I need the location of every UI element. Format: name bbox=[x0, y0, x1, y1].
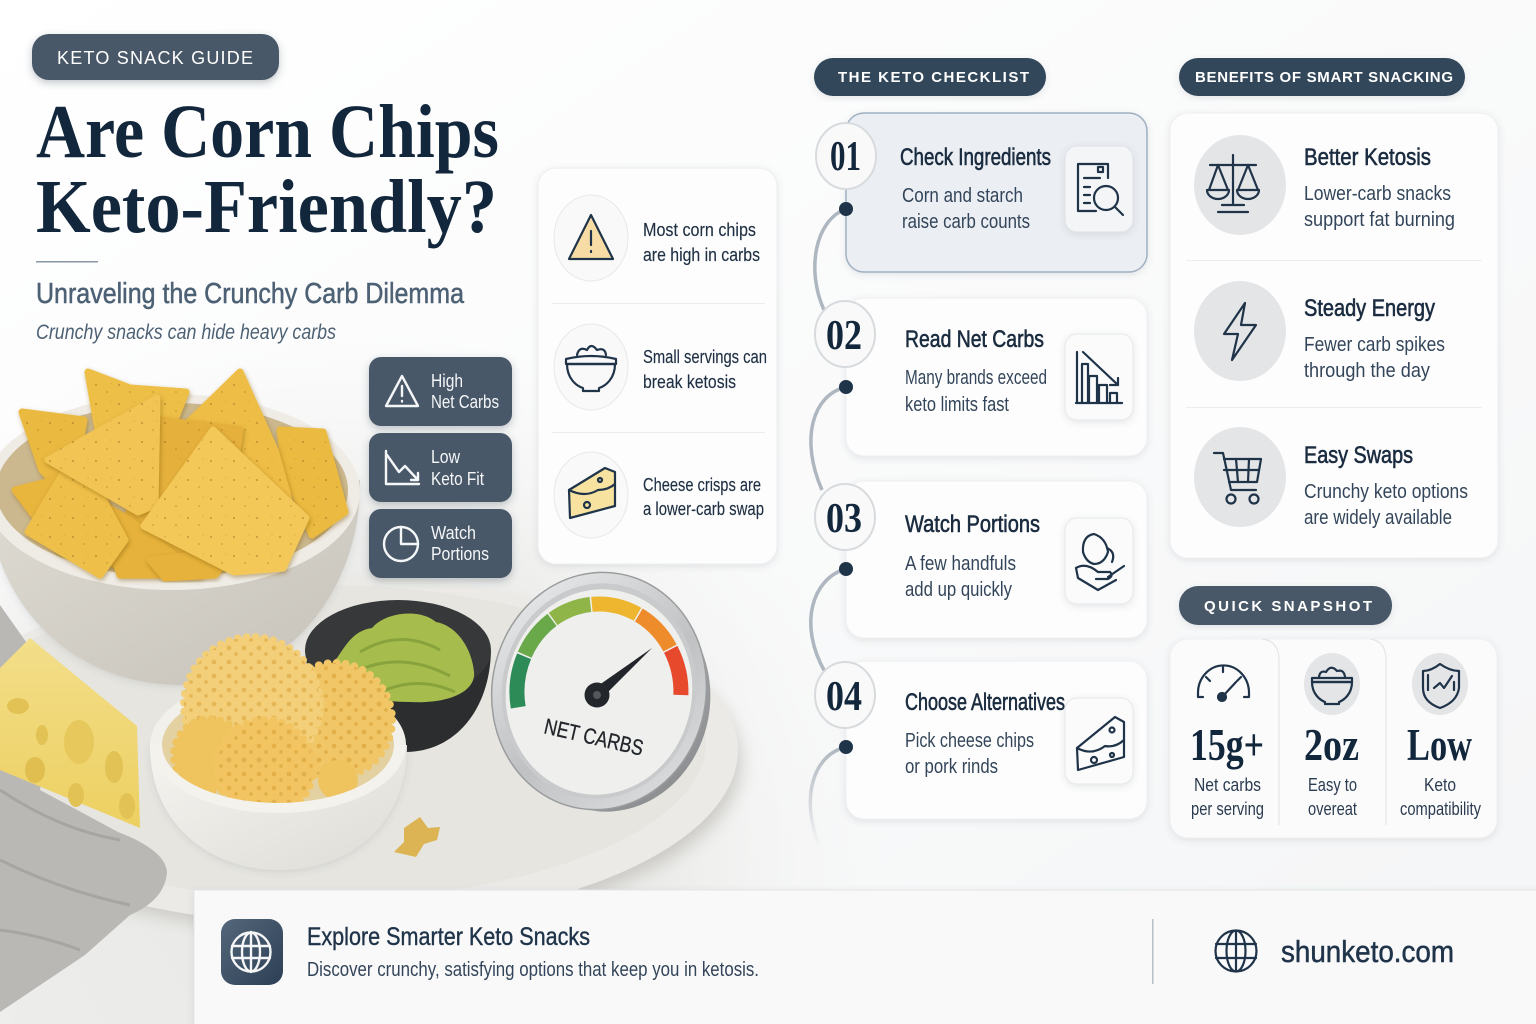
benefit: easy swaps: are widely available bbox=[1304, 507, 1452, 529]
large ceramic bowl bbox=[0, 394, 360, 685]
icon: clock pie bbox=[384, 527, 418, 561]
badge 01 bbox=[816, 123, 876, 189]
step 3 card: add up quickly bbox=[905, 579, 1012, 601]
warning row: are high in carbs bbox=[643, 244, 760, 265]
gauge scale arcs bbox=[517, 604, 681, 707]
badge 04 bbox=[815, 662, 875, 728]
tagline: Crunchy snacks can hide heavy carbs bbox=[36, 321, 336, 344]
icon: falling chart bbox=[386, 451, 419, 484]
tag: high net carbs: Net Carbs bbox=[431, 391, 499, 412]
stat: portion: 2oz bbox=[1304, 719, 1359, 770]
website link bbox=[1216, 930, 1454, 972]
icon: cheese bbox=[569, 468, 615, 518]
hero food photo illustration bbox=[0, 368, 754, 1024]
heading pill: benefits of smart snacking: BENEFITS OF SMART SNACKING bbox=[1195, 69, 1453, 86]
step 1 card: raise carb counts bbox=[902, 211, 1030, 233]
step 1 card bbox=[846, 113, 1147, 272]
tag: low keto fit: Low bbox=[431, 446, 461, 467]
icon: warning triangle bbox=[386, 376, 418, 406]
stat: net carbs bbox=[1190, 665, 1264, 819]
benefit: easy swaps: Crunchy keto options bbox=[1304, 481, 1468, 503]
swap row: Cheese crisps are bbox=[643, 474, 761, 495]
benefit: better ketosis: Lower-carb snacks bbox=[1304, 183, 1451, 205]
crumb bbox=[394, 817, 440, 857]
icon box: document search bbox=[1065, 146, 1133, 232]
servings row: Small servings can bbox=[643, 346, 767, 367]
benefit: steady energy: Fewer carb spikes bbox=[1304, 334, 1445, 356]
icon: bowl bbox=[566, 346, 616, 391]
step 1 card: Corn and starch bbox=[902, 185, 1023, 207]
table surface bbox=[0, 320, 890, 1024]
website link: shunketo.com bbox=[1281, 934, 1454, 969]
title: Keto-Friendly? bbox=[36, 165, 497, 249]
badge 02 bbox=[815, 301, 875, 367]
tag: high net carbs bbox=[369, 357, 512, 426]
step 4 card bbox=[846, 661, 1147, 819]
net carbs gauge bbox=[473, 555, 728, 828]
swap row bbox=[554, 452, 764, 538]
tag: watch portions: Portions bbox=[431, 543, 489, 564]
benefit: steady energy: Steady Energy bbox=[1304, 295, 1435, 322]
subtitle: Unraveling the Crunchy Carb Dilemma bbox=[36, 278, 465, 310]
icon: lightning bbox=[1224, 303, 1256, 360]
stat: net carbs: 15g+ bbox=[1190, 719, 1264, 770]
call to action text: Explore Smarter Keto Snacks bbox=[307, 923, 590, 951]
stat: compatibility: Low bbox=[1407, 719, 1472, 770]
footer bar bbox=[194, 890, 1536, 1024]
step 4 card: Pick cheese chips bbox=[905, 730, 1034, 752]
badge: keto snack guide bbox=[32, 34, 279, 80]
panel: corn chip warnings bbox=[538, 168, 777, 564]
stat: portion bbox=[1304, 653, 1360, 819]
icon: globe tile bbox=[221, 919, 283, 985]
heading pill: the keto checklist: THE KETO CHECKLIST bbox=[838, 69, 1029, 86]
step 2 card: Read Net Carbs bbox=[905, 326, 1044, 353]
stat: portion: Easy to bbox=[1308, 775, 1357, 795]
tortilla chips pile bbox=[10, 365, 350, 580]
icon: warning bbox=[569, 215, 613, 259]
title bbox=[36, 90, 499, 249]
step 3 card: Watch Portions bbox=[905, 511, 1040, 538]
panel: benefits bbox=[1170, 113, 1498, 558]
heading pill: the keto checklist bbox=[814, 58, 1046, 96]
step 3 card: A few handfuls bbox=[905, 553, 1016, 575]
tag: low keto fit: Keto Fit bbox=[431, 468, 484, 489]
benefit: easy swaps: Easy Swaps bbox=[1304, 442, 1413, 469]
benefit: easy swaps bbox=[1194, 427, 1468, 529]
stat: compatibility: compatibility bbox=[1400, 799, 1481, 819]
icon: shield bbox=[1423, 664, 1459, 708]
icon: globe bbox=[1216, 930, 1256, 972]
step number badges bbox=[815, 123, 876, 754]
heading pill: quick snapshot bbox=[1179, 586, 1392, 625]
call to action text: Discover crunchy, satisfying options that keep you in ketosis. bbox=[307, 959, 759, 981]
stat: net carbs: Net carbs bbox=[1194, 775, 1261, 795]
badge 03: 03 bbox=[826, 496, 862, 542]
badge 04: 04 bbox=[826, 674, 862, 720]
cheese wedge bbox=[0, 638, 140, 828]
badge 01: 01 bbox=[830, 134, 861, 180]
panel: quick snapshot stats bbox=[1170, 639, 1497, 838]
tag: watch portions bbox=[369, 509, 512, 578]
benefit: better ketosis bbox=[1194, 135, 1455, 235]
stat: net carbs: per serving bbox=[1191, 799, 1264, 819]
dark guacamole bowl bbox=[305, 600, 491, 752]
warning row: Most corn chips bbox=[643, 219, 756, 240]
icon: bowl bbox=[1312, 668, 1352, 704]
grey napkin bbox=[0, 605, 167, 1012]
badge 02: 02 bbox=[826, 313, 862, 359]
benefit: better ketosis: support fat burning bbox=[1304, 209, 1455, 231]
title: Are Corn Chips bbox=[36, 90, 499, 174]
tag: low keto fit bbox=[369, 433, 512, 502]
stone serving plate bbox=[0, 575, 740, 932]
call to action text bbox=[307, 923, 759, 981]
step 4 card: or pork rinds bbox=[905, 756, 998, 778]
servings row: break ketosis bbox=[643, 371, 736, 392]
heading pill: quick snapshot: QUICK SNAPSHOT bbox=[1204, 598, 1372, 615]
warning row bbox=[554, 195, 760, 281]
stat: compatibility: Keto bbox=[1424, 775, 1456, 795]
stat: portion: overeat bbox=[1308, 799, 1357, 819]
step 4 card: Choose Alternatives bbox=[905, 689, 1065, 716]
benefit: steady energy: through the day bbox=[1304, 360, 1430, 382]
stat: compatibility bbox=[1400, 653, 1481, 819]
icon: scales bbox=[1207, 155, 1259, 212]
step 2 card bbox=[846, 298, 1147, 456]
icon: gauge bbox=[1198, 665, 1249, 701]
step 2 card: Many brands exceed bbox=[905, 367, 1047, 389]
cheese crisps bbox=[174, 637, 392, 816]
white bowl with cheese crisps bbox=[150, 637, 407, 870]
icon box: falling bars bbox=[1065, 334, 1133, 420]
badge 03 bbox=[815, 484, 875, 550]
benefit: better ketosis: Better Ketosis bbox=[1304, 144, 1431, 171]
icon box: cheese bbox=[1065, 698, 1133, 784]
step 2 card: keto limits fast bbox=[905, 394, 1009, 416]
servings row bbox=[554, 324, 767, 410]
heading pill: benefits of smart snacking bbox=[1179, 58, 1465, 96]
timeline dots bbox=[839, 202, 853, 754]
gauge needle bbox=[584, 648, 652, 708]
tag: watch portions: Watch bbox=[431, 522, 476, 543]
step 3 card bbox=[846, 481, 1147, 638]
icon box: hand holding bbox=[1065, 518, 1133, 604]
icon: shopping cart bbox=[1214, 453, 1261, 504]
badge: keto snack guide: KETO SNACK GUIDE bbox=[57, 48, 253, 68]
step 1 card: Check Ingredients bbox=[900, 144, 1051, 171]
gauge label: NET CARBS bbox=[542, 714, 646, 761]
guacamole bbox=[326, 613, 474, 702]
tag: high net carbs: High bbox=[431, 370, 463, 391]
benefit: steady energy bbox=[1194, 281, 1445, 382]
checklist timeline connectors bbox=[810, 209, 846, 848]
swap row: a lower-carb swap bbox=[643, 498, 764, 519]
